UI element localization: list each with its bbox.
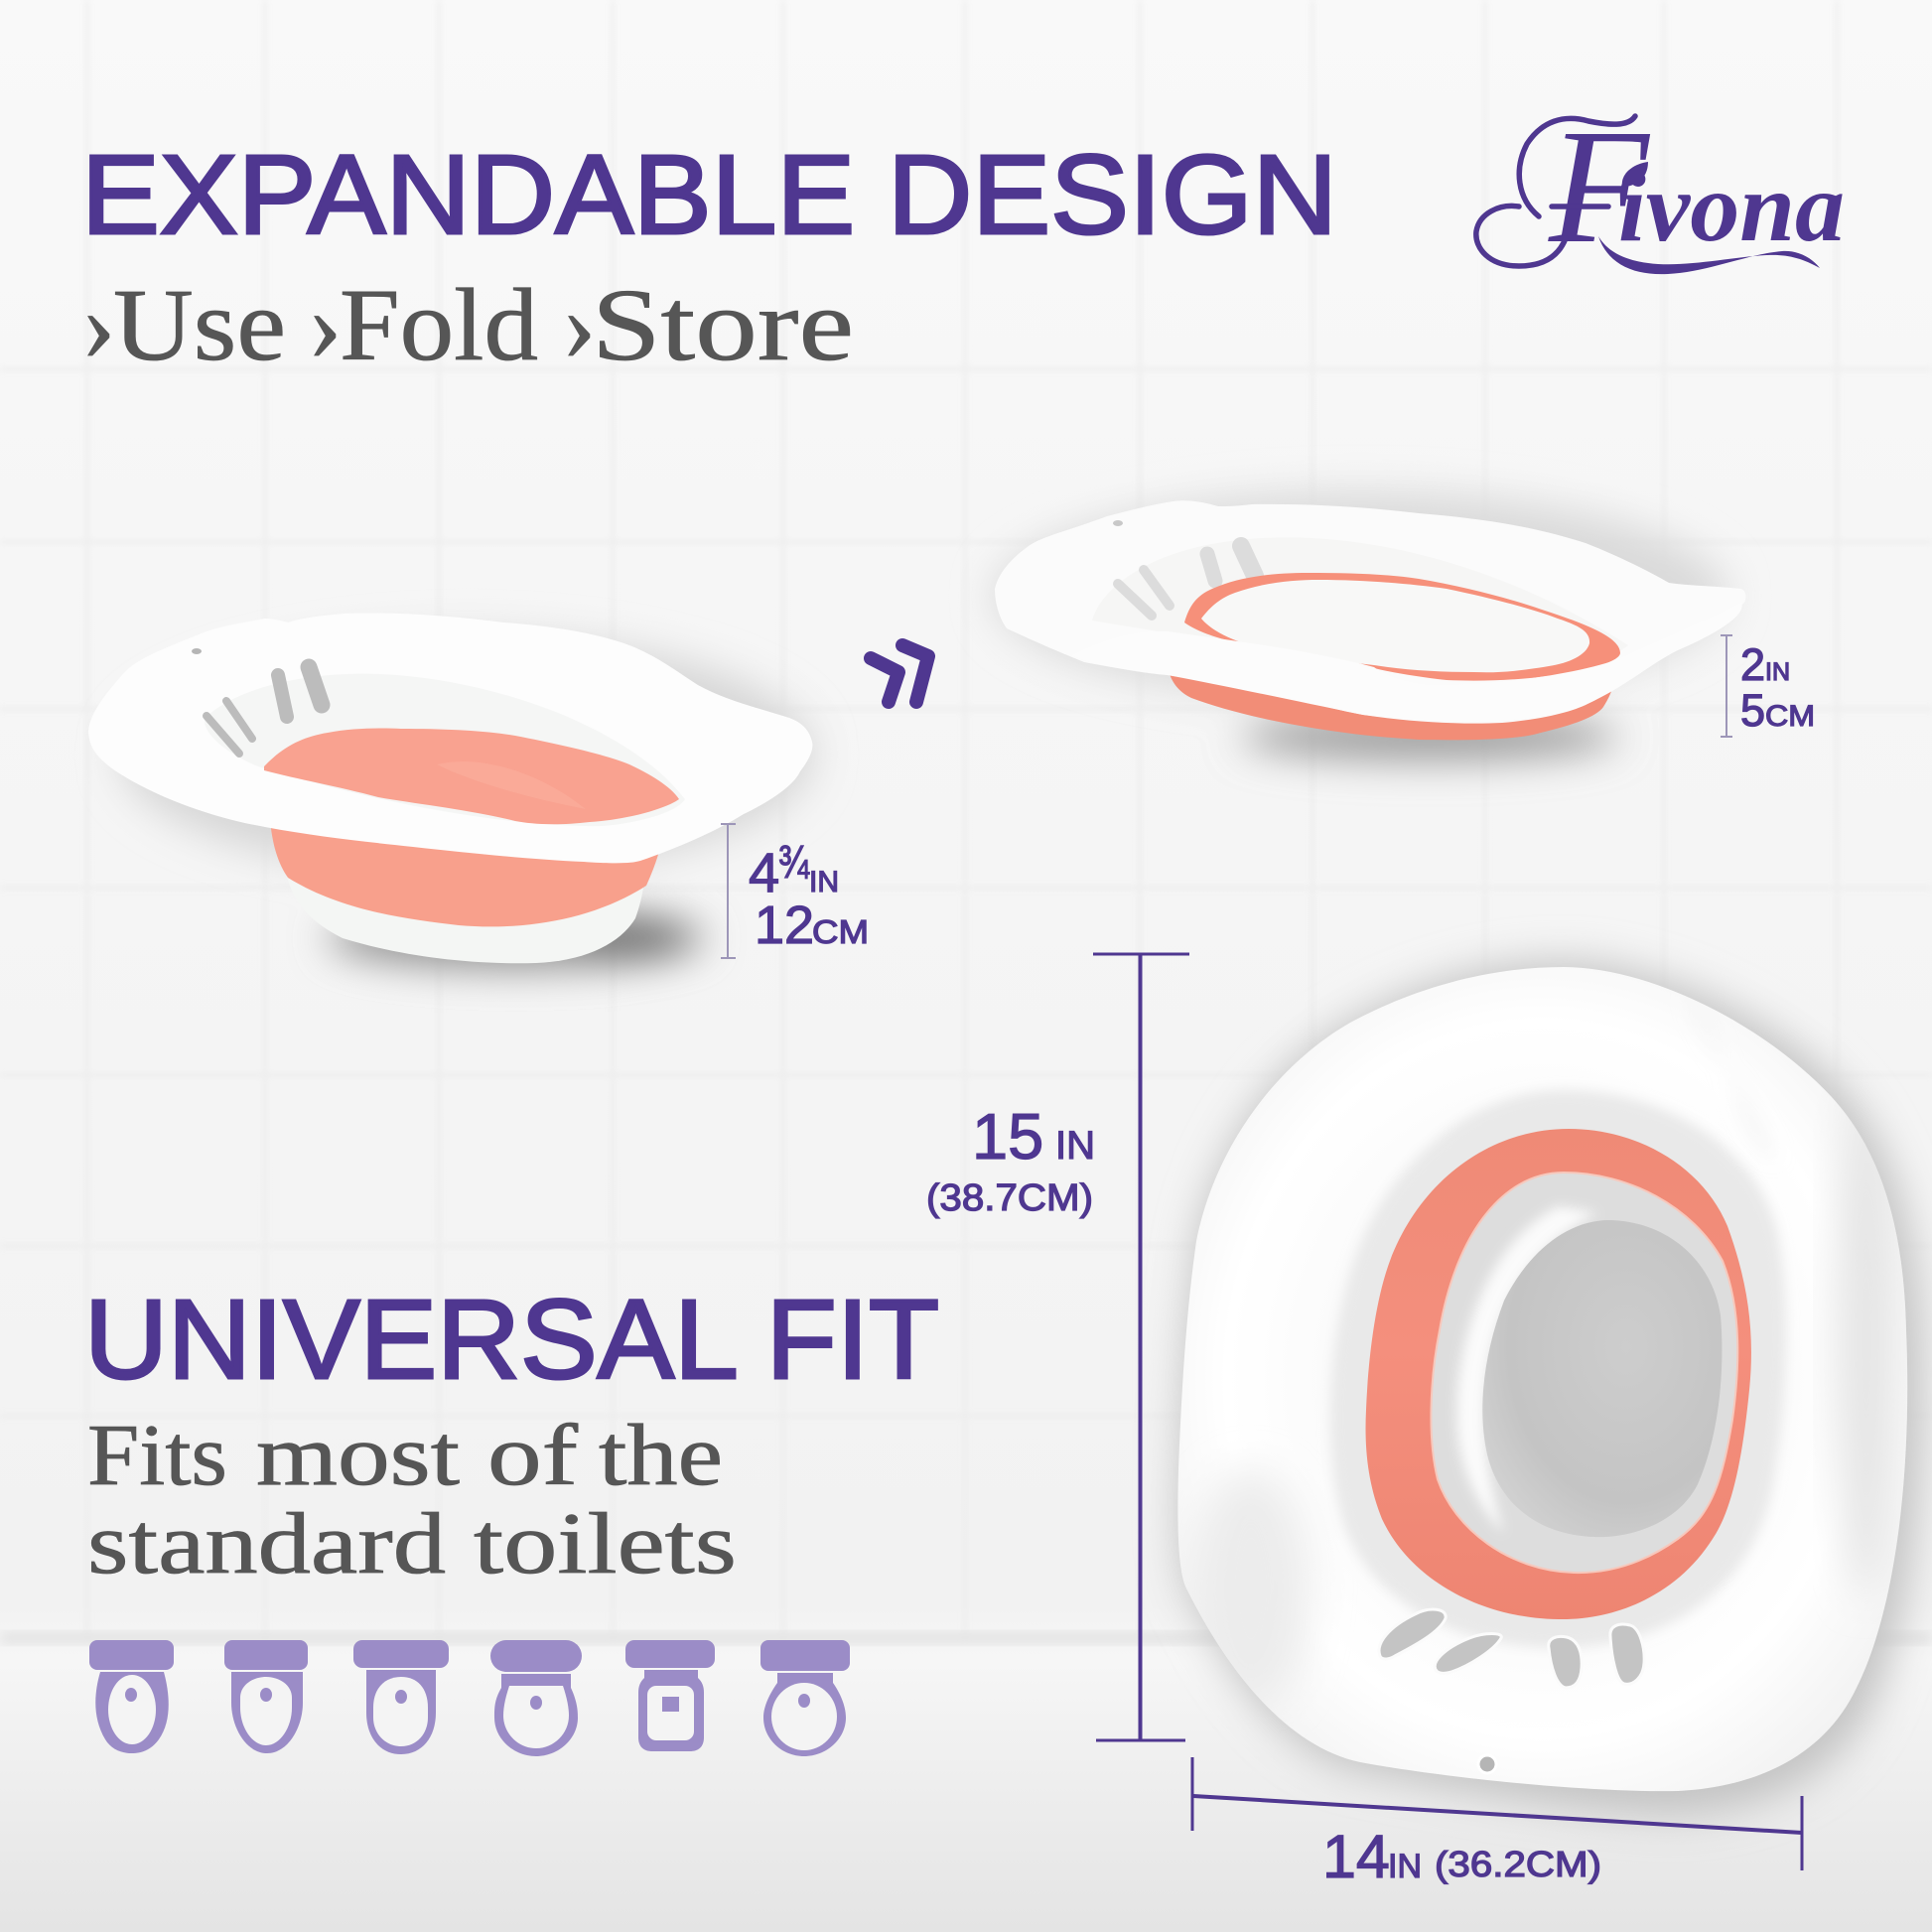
label: 15 in: 15	[972, 1100, 1043, 1173]
label: 4 3/4 in: 4	[749, 841, 779, 903]
body text: fits most toilets: Fits	[87, 1408, 227, 1504]
rim inner shade	[1092, 537, 1628, 676]
subtitle: Use Fold Store: Fold	[340, 268, 538, 382]
inner collapsed basin	[1201, 580, 1589, 672]
product: collapsed bowl	[993, 491, 1745, 760]
rim hole	[192, 648, 202, 654]
inner step	[1431, 1173, 1737, 1573]
label: 14 in 36.2 cm: 14	[1322, 1823, 1390, 1890]
rim surface shading	[1191, 993, 1896, 1708]
dimension: width 14 in: IN	[1388, 1848, 1422, 1885]
logo: Fivona	[1476, 95, 1845, 277]
collapsed shadow	[993, 491, 1727, 760]
subtitle: Use Fold Store: ›	[81, 268, 116, 382]
logo: Fivona: ivona	[1618, 152, 1845, 262]
icon: toilet 5	[625, 1640, 715, 1751]
label: 5 cm: 5	[1740, 685, 1765, 736]
dimension: width 14 in: (36.2CM)	[1435, 1844, 1601, 1884]
inner recess	[1330, 1090, 1786, 1648]
bowl shadow	[119, 635, 814, 968]
subtitle: Use Fold Store: Store	[592, 268, 854, 382]
toilet icons row	[89, 1640, 850, 1756]
dimension: expanded height: IN	[809, 866, 839, 898]
body text: fits most toilets: of	[487, 1408, 579, 1504]
label: 2 in: 2	[1740, 639, 1765, 690]
rim inner bowl shade	[205, 674, 685, 826]
body text: fits most toilets: the	[599, 1408, 723, 1504]
title: Expandable Design: EXPANDABLE DESIGN	[81, 132, 1337, 257]
dimension: collapsed height	[1721, 635, 1815, 737]
body text: fits most toilets: standard	[87, 1496, 446, 1592]
salmon basin interior	[264, 728, 679, 824]
collapsed rim	[995, 500, 1745, 724]
front rim	[1072, 603, 1742, 721]
dimension: expanded height: CM	[812, 913, 869, 950]
dimension: length 15 in	[926, 954, 1189, 1740]
icon: toilet 3	[353, 1640, 449, 1754]
icon: toilet 6	[760, 1640, 850, 1756]
dimension: collapsed height: IN	[1765, 658, 1790, 686]
drain slots	[207, 667, 322, 754]
subtitle: Use Fold Store	[81, 268, 854, 382]
product: top view bowl	[1177, 961, 1923, 1817]
dimension: length 15 in: IN	[1055, 1124, 1095, 1168]
subtitle: Use Fold Store: ›	[308, 268, 343, 382]
white rim	[1177, 967, 1907, 1791]
dimension: width 14 in	[1192, 1757, 1802, 1890]
label: 38.7 cm: (38.7CM)	[926, 1177, 1093, 1219]
rim hole	[1113, 520, 1123, 526]
basin floor	[1482, 1220, 1722, 1537]
arrow: double chevron	[871, 645, 928, 702]
dimension: collapsed height: CM	[1765, 700, 1815, 733]
icon: toilet 4	[490, 1640, 582, 1756]
top view shadow	[1177, 961, 1923, 1817]
label: 12 cm: 12	[755, 896, 814, 955]
icon: toilet 2	[224, 1640, 308, 1753]
bowl rim	[88, 613, 812, 863]
logo: Fivona: F	[1548, 95, 1651, 277]
salmon collapsible wall	[270, 819, 663, 926]
collapsed slots	[1118, 546, 1255, 616]
body text: fits most toilets: most	[256, 1408, 460, 1504]
salmon ring	[1366, 1129, 1751, 1619]
dimension: expanded height: ¾	[778, 836, 810, 888]
subtitle: Use Fold Store: Use	[113, 268, 286, 382]
body text: fits most toilets	[87, 1408, 737, 1592]
salmon ring	[1184, 573, 1620, 681]
subtitle: Use Fold Store: ›	[562, 268, 597, 382]
salmon base	[1168, 667, 1615, 740]
drain slots	[1379, 1609, 1644, 1688]
heading: Universal Fit: UNIVERSAL FIT	[84, 1277, 939, 1402]
body text: fits most toilets: toilets	[474, 1496, 737, 1592]
front hole	[1478, 1755, 1496, 1773]
dimension: expanded height	[721, 824, 869, 958]
left highlight	[1456, 1206, 1598, 1534]
product: expanded bowl	[88, 613, 814, 968]
icon: toilet 1	[89, 1640, 174, 1753]
bowl white base	[285, 864, 645, 963]
